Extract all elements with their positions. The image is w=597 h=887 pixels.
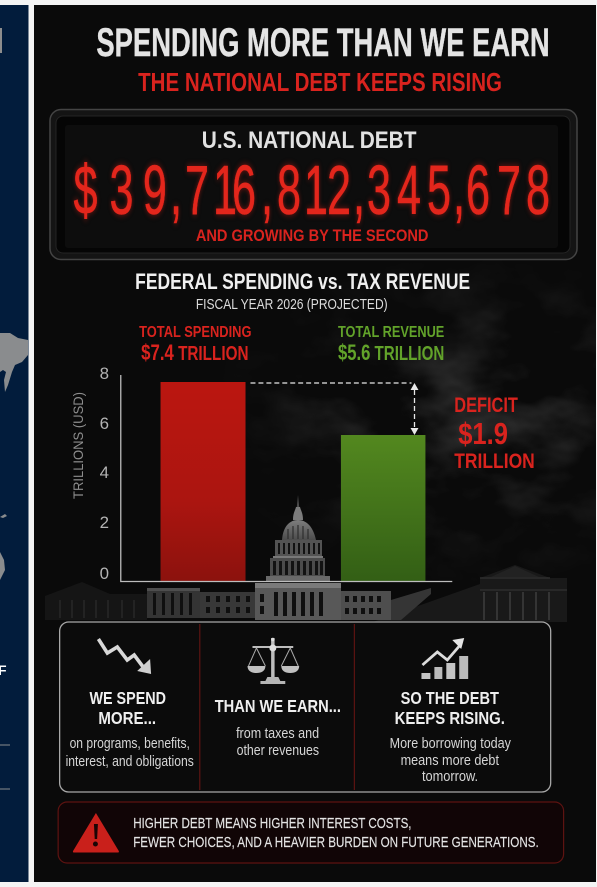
revenue bar [341,435,425,581]
spending bar [161,382,246,581]
column: debt keeps rising: means more debt [401,753,499,769]
deficit callout: TRILLION [454,450,535,473]
column: than we earn [215,638,341,759]
y axis ticks [100,364,109,583]
revenue label: TOTAL REVENUE [338,324,444,341]
column: we spend more: interest, and obligations [66,754,194,770]
column: debt keeps rising: tomorrow. [422,769,478,785]
chart heading: FEDERAL SPENDING vs. TAX REVENUE [135,269,470,294]
column: we spend more [66,639,194,770]
axes [121,375,452,582]
y axis ticks: 6 [100,414,109,433]
column: debt keeps rising: SO THE DEBT [401,688,499,708]
deficit callout [454,394,535,473]
chart and explanation content [58,269,564,863]
bar chart [70,364,452,583]
subtitle: THE NATIONAL DEBT KEEPS RISING [138,69,502,97]
warning banner [58,802,564,863]
column: we spend more: WE SPEND [89,688,166,708]
spending label [139,324,251,365]
capitol right wing building [373,565,567,622]
column: we spend more: MORE... [98,708,156,728]
icon: scales [248,638,299,684]
spending label: $7.4 TRILLION [141,340,248,365]
deficit dashed arrow [250,383,414,428]
column: we spend more: on programs, benefits, [70,736,190,752]
deficit callout: DEFICIT [454,394,518,417]
capitol dome [266,495,330,581]
y axis title: TRILLIONS (USD) [70,392,86,499]
icon: falling arrow [98,639,151,674]
y axis ticks: 0 [100,564,109,583]
column: than we earn: THAN WE EARN... [215,696,341,716]
icon: rising chart [421,638,468,679]
counter label: U.S. NATIONAL DEBT [202,127,417,154]
column: than we earn: from taxes and [236,726,319,742]
column: debt keeps rising: KEEPS RISING. [395,708,505,728]
counter caption: AND GROWING BY THE SECOND [196,227,429,245]
column: than we earn: other revenues [237,743,319,759]
counter digits: $39,716,812,345,678 [73,151,550,230]
chart subheading: FISCAL YEAR 2026 (PROJECTED) [196,296,388,313]
y axis ticks: 2 [100,513,109,532]
capitol silhouette [45,495,567,622]
capitol central block and wings [147,583,431,620]
capitol left building [45,582,147,620]
column: debt keeps rising: More borrowing today [390,736,512,752]
column: debt keeps rising [390,638,512,785]
revenue label [338,324,444,365]
y axis ticks: 4 [100,463,109,482]
warning text: HIGHER DEBT MEANS HIGHER INTEREST COSTS, [133,815,412,832]
spending label: TOTAL SPENDING [139,324,251,341]
icon: warning triangle [73,813,119,853]
revenue label: $5.6 TRILLION [338,340,444,365]
deficit callout: $1.9 [458,416,508,451]
debt counter panel [50,110,577,260]
left neighbouring panel [0,5,28,882]
explanation panel [60,622,551,792]
y axis ticks: 8 [100,364,109,383]
